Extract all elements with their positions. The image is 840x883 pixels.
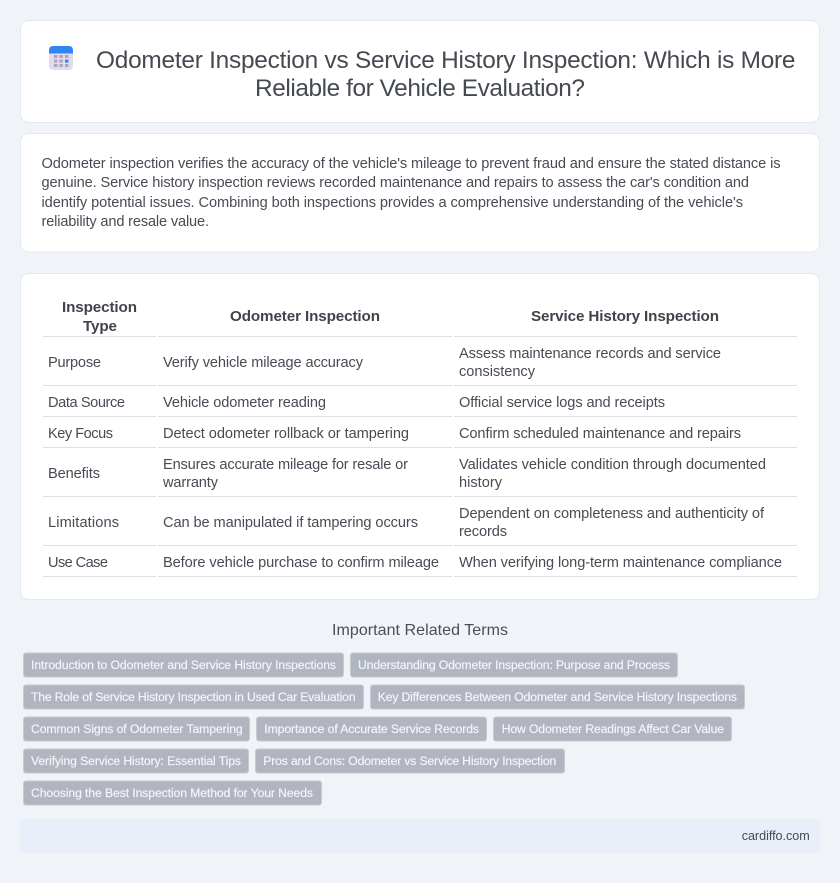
tag: The Role of Service History Inspection in Used Car Evaluation <box>31 690 356 704</box>
text block: intro paragraph <box>42 156 780 230</box>
table header: Odometer Inspection <box>230 308 380 325</box>
table row: benefits: Ensures accurate mileage for resale or <box>163 457 408 473</box>
panel: comparison table <box>20 274 820 600</box>
table row: benefits: history <box>459 475 503 491</box>
table row: data source <box>48 395 665 411</box>
footer <box>20 819 820 853</box>
tag <box>350 653 678 677</box>
tag: Key Differences Between Odometer and Service History Inspections <box>378 690 737 704</box>
table row: use case: Before vehicle purchase to confirm mileage <box>163 555 439 571</box>
tag: Pros and Cons: Odometer vs Service History Inspection <box>263 754 556 768</box>
tag: Verifying Service History: Essential Tips <box>31 754 241 768</box>
table row: use case <box>48 555 782 571</box>
table row: limitations: Dependent on completeness and authenticity of <box>459 506 765 522</box>
table row: limitations: records <box>459 524 507 540</box>
table row: use case: Use Case <box>48 555 108 571</box>
tags: related terms <box>24 653 744 805</box>
panel: header <box>20 20 820 122</box>
table row: key focus: Key Focus <box>48 426 113 442</box>
table row: purpose: Verify vehicle mileage accuracy <box>163 355 364 371</box>
table row: benefits: warranty <box>162 475 219 491</box>
table row: use case: When verifying long-term maintenance compliance <box>459 555 782 571</box>
tag <box>24 749 248 773</box>
tag <box>24 781 322 805</box>
table row: key focus <box>48 426 741 442</box>
table row: limitations: Limitations <box>48 515 119 531</box>
text block: intro paragraph: reliability and resale value. <box>42 214 209 230</box>
text block: intro paragraph: genuine. Service history inspection reviews recorded maintenance and repairs to assess the car's condition and <box>42 175 749 191</box>
tag: Common Signs of Odometer Tampering <box>31 722 243 736</box>
table row: benefits: Benefits <box>48 466 100 482</box>
table row: benefits: Validates vehicle condition through documented <box>459 457 766 473</box>
table row: data source: Official service logs and receipts <box>459 395 665 411</box>
text block: intro paragraph: identify potential issues. Combining both inspections provides a comprehensive understanding of the vehicle's <box>42 195 743 211</box>
table row: limitations <box>48 506 765 540</box>
tag <box>370 685 744 709</box>
text block: intro paragraph: Odometer inspection verifies the accuracy of the vehicle's mileage to prevent fraud and ensure the stated distance is <box>42 156 780 172</box>
tag: Understanding Odometer Inspection: Purpose and Process <box>358 658 670 672</box>
table row: purpose <box>48 346 721 380</box>
table row: benefits <box>48 457 766 491</box>
title <box>96 47 796 102</box>
panel: summary text <box>20 134 820 252</box>
table header <box>62 299 719 335</box>
table row: limitations: Can be manipulated if tampering occurs <box>163 515 418 531</box>
table header: Type <box>83 318 117 335</box>
tag: Introduction to Odometer and Service History Inspections <box>31 658 336 672</box>
tag: Importance of Accurate Service Records <box>264 722 479 736</box>
tag <box>24 717 250 741</box>
icon: calendar <box>49 46 73 70</box>
tag <box>256 749 564 773</box>
tag <box>256 717 486 741</box>
table header: Inspection <box>62 299 137 316</box>
heading: related terms: Important Related Terms <box>332 622 508 639</box>
title: Reliable for Vehicle Evaluation? <box>255 75 585 102</box>
table row: purpose: consistency <box>459 364 536 380</box>
tag <box>24 653 344 677</box>
table header: Service History Inspection <box>531 308 719 325</box>
tag <box>494 717 732 741</box>
table row: key focus: Detect odometer rollback or tampering <box>163 426 409 442</box>
tag: Choosing the Best Inspection Method for Your Needs <box>31 786 313 800</box>
table row: purpose: Assess maintenance records and service <box>459 346 721 362</box>
table row: key focus: Confirm scheduled maintenance and repairs <box>459 426 741 442</box>
table row: data source: Data Source <box>48 395 125 411</box>
tag <box>24 685 364 709</box>
footer: cardiffo.com <box>742 829 810 843</box>
tag: How Odometer Readings Affect Car Value <box>502 722 724 736</box>
table row: purpose: Purpose <box>48 355 101 371</box>
title: Odometer Inspection vs Service History Inspection: Which is More <box>96 47 796 74</box>
table row lines <box>43 336 797 577</box>
table row: data source: Vehicle odometer reading <box>163 395 326 411</box>
